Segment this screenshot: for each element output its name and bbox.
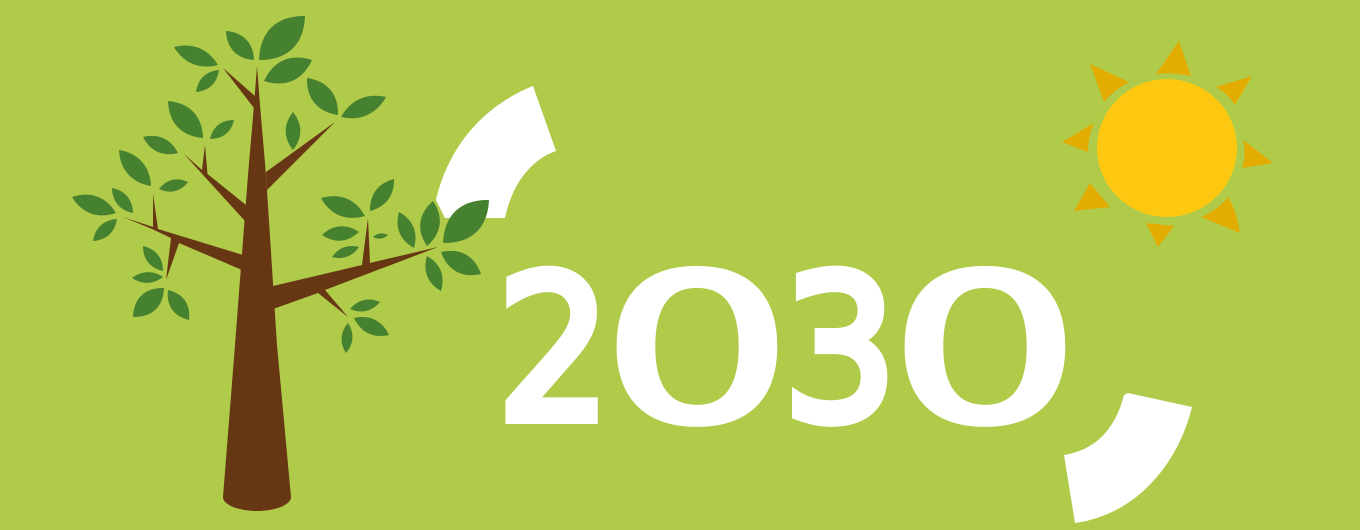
leaves: top crown — [171, 5, 390, 150]
white arc: upper left — [436, 86, 556, 218]
sun rays — [1062, 41, 1273, 247]
leaves: left side — [69, 94, 238, 324]
white arc: lower right — [1064, 393, 1192, 523]
title: 2030: 0 — [889, 231, 1081, 470]
title: 2030: 2 — [497, 233, 611, 466]
title: 2030 — [497, 231, 1081, 470]
title: 2030: 3 — [783, 233, 897, 466]
title: 2030: 0 — [601, 231, 793, 470]
icon: sun — [1062, 41, 1273, 247]
tree trunk and branches — [123, 66, 438, 511]
leaves: right side — [318, 174, 499, 353]
tree — [69, 5, 499, 511]
sun disc — [1097, 79, 1237, 217]
